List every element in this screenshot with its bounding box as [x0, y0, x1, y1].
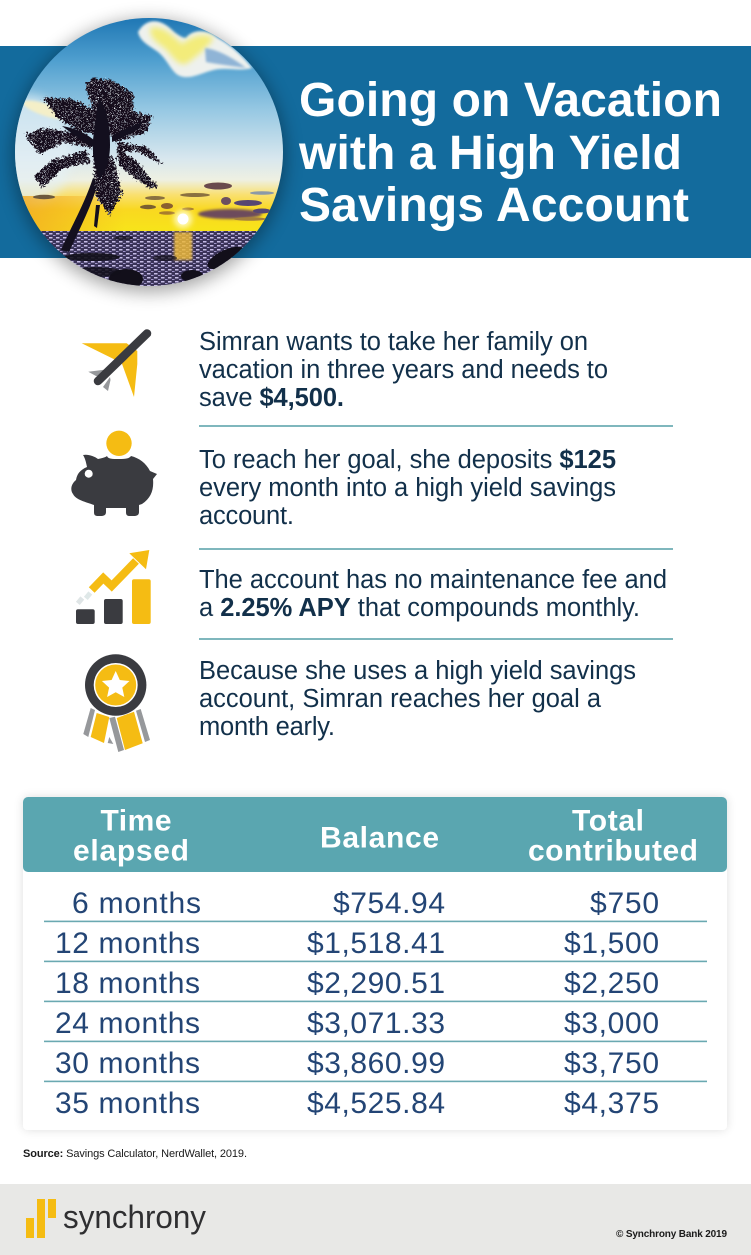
title: Savings Account	[299, 179, 689, 232]
copyright: © Synchrony Bank 2019	[616, 1229, 727, 1240]
title: with a High Yield	[298, 127, 682, 180]
table	[23, 797, 727, 1130]
table header	[23, 797, 727, 872]
table header: contributed	[528, 834, 698, 868]
table header: Balance	[320, 822, 439, 854]
divider	[199, 638, 673, 640]
icon: piggy bank	[71, 431, 157, 516]
icon: airplane	[82, 334, 147, 397]
text: outcome	[199, 657, 636, 741]
text: outcome: account, Simran reaches her goal a	[199, 685, 602, 713]
title: Going on Vacation	[299, 74, 722, 127]
row: 24 months	[55, 1007, 659, 1040]
text: account terms: a 2.25% APY that compounds monthly.	[199, 594, 640, 622]
logo: synchrony: synchrony	[63, 1199, 206, 1235]
row: 24 months: $3,071.33	[307, 1007, 445, 1040]
divider	[199, 425, 673, 427]
row: 30 months	[55, 1047, 659, 1080]
text: account terms: The account has no maintenance fee and	[199, 566, 667, 594]
row: 35 months: 35 months	[55, 1087, 200, 1120]
row: 12 months: 12 months	[55, 927, 200, 960]
text: deposit: To reach her goal, she deposits $125	[199, 446, 616, 474]
row: 6 months: 6 months	[72, 887, 201, 920]
row: 18 months: $2,250	[564, 967, 659, 1000]
text: goal: vacation in three years and needs to	[199, 356, 608, 384]
text: outcome: month early.	[199, 713, 335, 741]
row: 18 months: $2,290.51	[307, 967, 445, 1000]
source note: Source: Savings Calculator, NerdWallet, 2019.	[23, 1148, 247, 1160]
table body	[23, 860, 727, 1130]
row: 18 months	[55, 967, 659, 1000]
text: goal: save $4,500.	[199, 384, 344, 412]
row: 30 months: $3,860.99	[307, 1047, 445, 1080]
text: outcome: Because she uses a high yield savings	[199, 657, 636, 685]
row: 18 months: 18 months	[55, 967, 200, 1000]
sun	[174, 210, 192, 228]
row: 12 months: $1,500	[564, 927, 659, 960]
header banner	[0, 46, 751, 258]
photo: palm tree at sunset	[0, 15, 290, 292]
text: deposit	[199, 446, 616, 530]
row: 6 months: $750	[590, 887, 659, 920]
title	[298, 74, 722, 232]
icon: growth chart	[76, 550, 151, 624]
footer band	[0, 1184, 751, 1255]
row: 35 months	[55, 1087, 659, 1120]
table header: elapsed	[73, 834, 189, 868]
row: 6 months	[72, 887, 659, 920]
text: deposit: every month into a high yield savings	[199, 474, 616, 502]
sea	[40, 231, 258, 286]
divider	[199, 548, 673, 550]
row: 35 months: $4,375	[564, 1087, 659, 1120]
row: 12 months: $1,518.41	[307, 927, 445, 960]
cloud: upper right	[138, 21, 252, 77]
row: 6 months: $754.94	[333, 887, 445, 920]
cloud: left wisp	[23, 100, 64, 120]
row: 24 months: 24 months	[55, 1007, 200, 1040]
clouds: dark sunset streaks	[33, 182, 274, 221]
text: goal	[199, 328, 608, 412]
table card shadow	[23, 797, 727, 1130]
row: 30 months: $3,750	[564, 1047, 659, 1080]
text: goal: Simran wants to take her family on	[199, 328, 588, 356]
row: 35 months: $4,525.84	[307, 1087, 445, 1120]
palm tree	[25, 78, 163, 252]
icon: award medal	[83, 654, 150, 752]
row: 12 months	[55, 927, 659, 960]
table header: Time	[100, 804, 172, 838]
row: 30 months: 30 months	[55, 1047, 200, 1080]
table header: Total	[572, 804, 644, 838]
text: deposit: account.	[199, 502, 294, 530]
row: 24 months: $3,000	[564, 1007, 659, 1040]
text: account terms	[199, 566, 667, 622]
